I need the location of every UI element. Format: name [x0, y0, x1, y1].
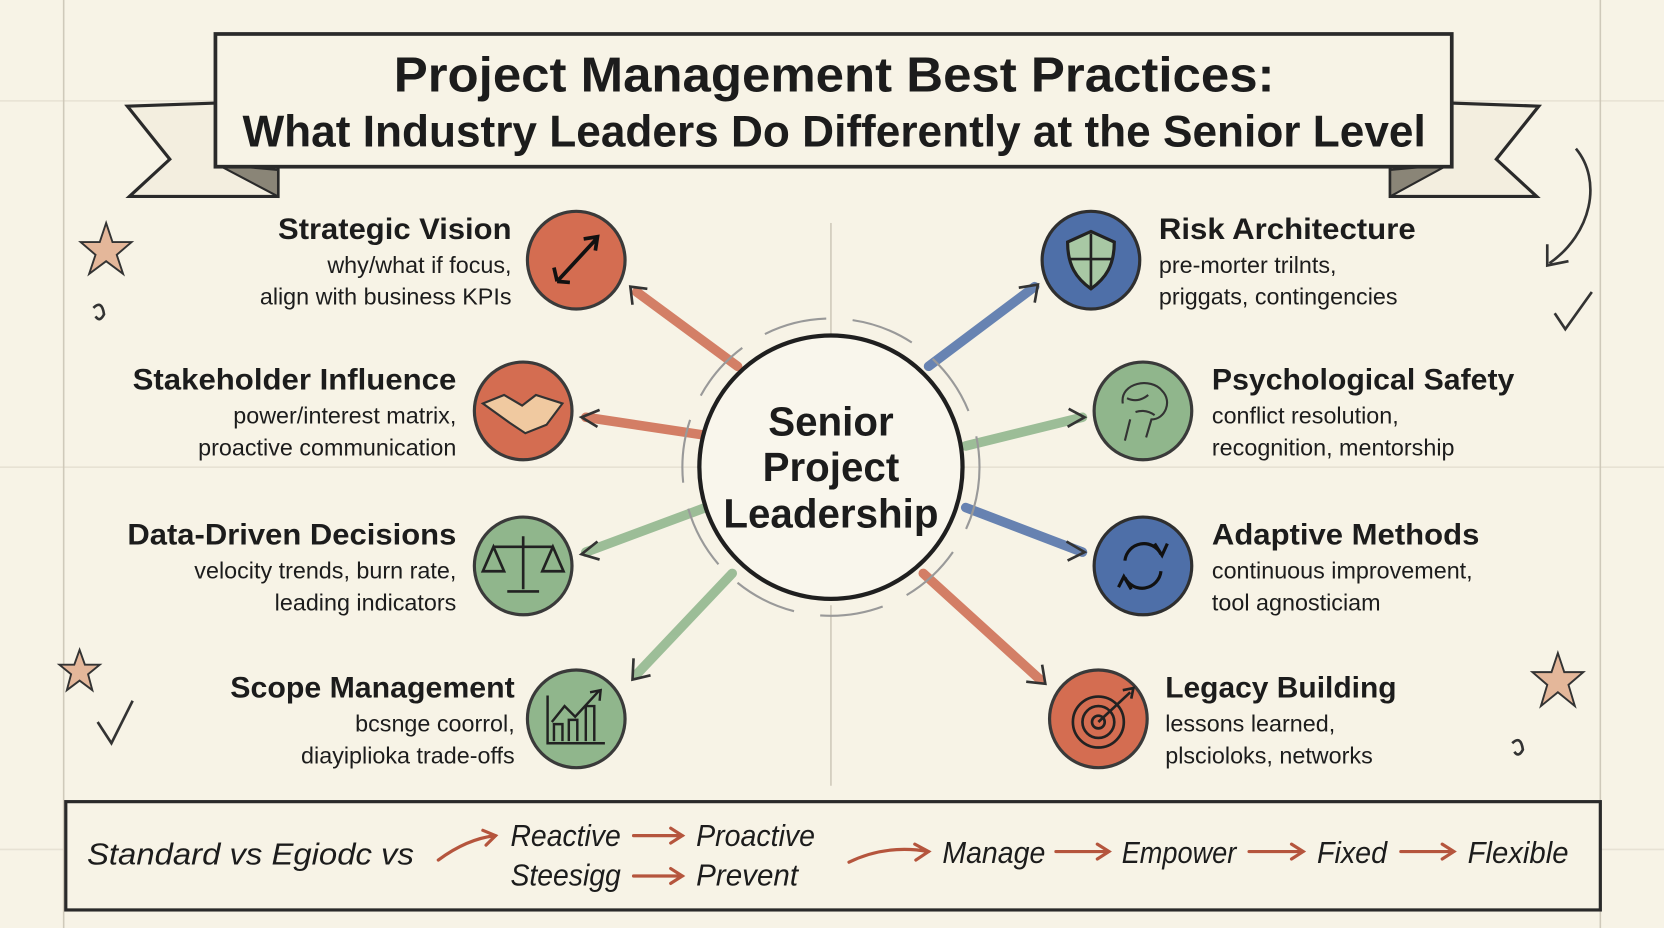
text: legacy: lessons learned, — [1165, 711, 1335, 737]
text: scope: diayiplioka trade-offs — [301, 742, 515, 768]
bottom comparison box: Flexible — [1468, 835, 1568, 870]
center hub — [682, 319, 980, 616]
bottom comparison box: Manage — [942, 835, 1045, 870]
text: risk — [1159, 213, 1416, 310]
bottom comparison box: Prevent — [696, 858, 799, 893]
bottom comparison box: Fixed — [1317, 835, 1388, 870]
text: scope — [230, 672, 515, 768]
text: data-driven — [127, 519, 456, 616]
text: risk: priggats, contingencies — [1159, 284, 1398, 310]
title: What Industry Leaders Do Differently at the Senior Level — [242, 108, 1426, 157]
arrows from hub — [586, 287, 1082, 680]
icon: handshake — [474, 362, 572, 460]
text: strategic vision: why/what if focus, — [326, 252, 512, 278]
text: psych safety: recognition, mentorship — [1212, 435, 1455, 461]
icon: cycle — [1094, 517, 1192, 615]
bottom comparison box: Proactive — [696, 818, 815, 853]
icon: shield — [1042, 211, 1140, 309]
text: stakeholder influence: proactive communication — [198, 435, 456, 461]
text: stakeholder influence — [133, 364, 456, 461]
center hub: Project — [763, 444, 899, 490]
bottom comparison box: Steesigg — [510, 858, 621, 893]
title: Project Management Best Practices: — [394, 48, 1275, 102]
text: psych safety: Psychological Safety — [1212, 364, 1515, 397]
text: psych safety — [1212, 364, 1515, 461]
text: scope: Scope Management — [230, 672, 515, 705]
text: adaptive — [1212, 519, 1479, 616]
decorative doodles — [59, 149, 1592, 754]
bottom comparison box: Reactive — [510, 818, 621, 853]
text: risk: pre-morter trilnts, — [1159, 252, 1337, 278]
text: data-driven: leading indicators — [275, 590, 456, 616]
text: legacy: Legacy Building — [1165, 672, 1397, 705]
text: legacy — [1165, 672, 1397, 768]
bottom comparison box — [66, 802, 1600, 910]
icon: scales — [474, 517, 572, 615]
bottom comparison box: Empower — [1122, 835, 1238, 870]
center hub: Senior — [768, 398, 894, 444]
center hub: Leadership — [723, 491, 938, 537]
text: strategic vision: align with business KPIs — [260, 284, 512, 310]
text: stakeholder influence: power/interest matrix, — [233, 403, 456, 429]
text: strategic vision: Strategic Vision — [278, 213, 512, 246]
text: risk: Risk Architecture — [1159, 213, 1416, 246]
text: data-driven: Data-Driven Decisions — [127, 519, 456, 552]
text: adaptive: tool agnosticiam — [1212, 590, 1381, 616]
text: scope: bcsnge coorrol, — [355, 711, 515, 737]
text: stakeholder influence: Stakeholder Influence — [133, 364, 456, 397]
text: adaptive: Adaptive Methods — [1212, 519, 1479, 552]
text: adaptive: continuous improvement, — [1212, 558, 1473, 584]
text: strategic vision — [260, 213, 512, 310]
title — [242, 48, 1426, 157]
icon: target — [1050, 670, 1147, 768]
text: legacy: plsciolоks, networks — [1165, 742, 1373, 768]
icon: chart — [527, 670, 625, 768]
icon: brain — [1094, 362, 1192, 460]
title banner — [127, 34, 1539, 196]
text: data-driven: velocity trends, burn rate, — [194, 558, 456, 584]
icon: strategic vision arrows — [527, 211, 625, 309]
text: psych safety: conflict resolution, — [1212, 403, 1399, 429]
bottom comparison box: Standard vs Egiodc vs — [87, 836, 414, 871]
